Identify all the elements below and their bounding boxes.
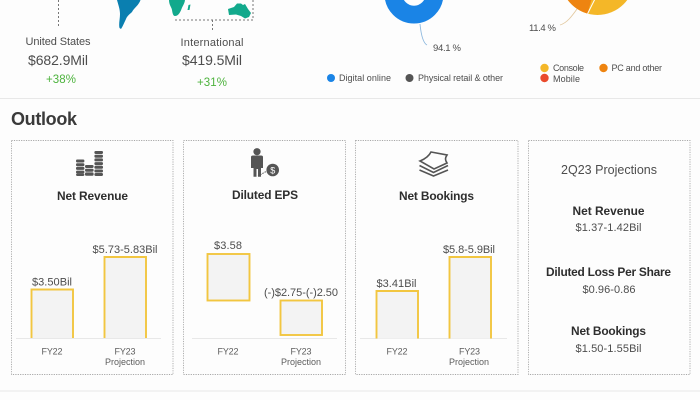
axis label: Projection: Projection	[105, 357, 145, 367]
legend marker: console	[540, 64, 549, 72]
pie console slice	[560, 0, 634, 15]
legend marker: PC	[599, 64, 608, 72]
pie slice divider	[588, 0, 597, 14]
bar value: FY23: $5.8-5.9Bil	[443, 244, 495, 256]
pie orange slice	[560, 0, 598, 14]
icon: coin stacks	[76, 151, 103, 176]
metric value: diluted loss: $0.96-0.86	[582, 284, 636, 296]
bar value: FY22: $3.58	[214, 240, 242, 252]
panel frame	[356, 140, 518, 374]
legend: sales channel	[327, 73, 503, 83]
metric label: net revenue: Net Revenue	[572, 204, 645, 218]
axis label: Projection: Projection	[281, 357, 321, 367]
pie label: 11.4 %	[529, 23, 557, 34]
panel: Net Bookings	[356, 140, 518, 374]
donut ring	[393, 0, 435, 15]
metric value: net bookings: $1.50-1.55Bil	[576, 343, 642, 355]
bar value: FY22: $3.41Bil	[376, 278, 416, 290]
legend marker: physical	[406, 74, 414, 82]
United States connector	[58, 0, 60, 28]
bar value: FY23: (-)$2.75-(-)2.50	[264, 287, 338, 299]
region name: United States	[26, 36, 91, 48]
panel title: Net Revenue	[57, 189, 128, 203]
axis label: FY22: FY22	[386, 346, 408, 356]
chain	[258, 171, 267, 176]
map: Australia	[228, 4, 251, 18]
pie chart: platform	[529, 0, 634, 34]
panel title: Diluted EPS	[232, 188, 298, 202]
world map fragment	[117, 0, 251, 29]
panel frame	[184, 140, 346, 374]
axis label: Projection: Projection	[449, 357, 489, 367]
donut leader line	[420, 24, 427, 45]
panel: Diluted EPS	[184, 140, 346, 374]
axis line	[360, 338, 507, 340]
legend text: mobile: Mobile	[553, 74, 580, 84]
axis label: FY23: FY23	[459, 346, 480, 356]
axis line	[192, 338, 337, 340]
legend marker: digital	[327, 74, 335, 82]
pie leader line	[560, 9, 577, 25]
panel: Net Revenue	[12, 140, 173, 374]
bar: FY22	[208, 254, 250, 300]
bar: FY23 Projection	[104, 257, 146, 338]
region value: $419.5Mil	[182, 52, 242, 68]
bar: FY23 Projection	[450, 257, 491, 338]
region: United States	[26, 36, 91, 86]
person head	[253, 148, 261, 155]
metric label: diluted loss: Diluted Loss Per Share	[546, 265, 671, 279]
region name: International	[180, 37, 244, 49]
icon: stack of papers	[420, 152, 448, 176]
panel frame	[12, 140, 173, 374]
bar value: FY22: $3.50Bil	[32, 276, 72, 288]
axis label: FY23 Projection: FY23	[114, 346, 136, 356]
map: South America	[117, 0, 140, 29]
panel title: 2Q23 Projections	[561, 163, 657, 177]
bar: FY22	[376, 291, 418, 338]
bar: FY23 Projection	[280, 300, 322, 335]
region: International	[180, 37, 244, 89]
legend marker: mobile	[540, 74, 549, 82]
donut label: 94.1 %	[433, 43, 462, 54]
axis label: FY22: FY22	[218, 346, 238, 356]
icon: person with dollar ball and chain	[251, 148, 279, 177]
axis label: FY23: FY23	[290, 346, 312, 356]
legend text: digital: Digital online	[339, 73, 391, 83]
region growth: +31%	[197, 77, 227, 89]
map: Africa	[169, 0, 185, 16]
axis label: FY22: FY22	[42, 346, 62, 356]
dollar ball	[266, 164, 279, 176]
map: Madagascar	[188, 4, 190, 10]
legend: platform	[540, 63, 662, 84]
metric value: net revenue: $1.37-1.42Bil	[576, 222, 642, 234]
legend text: physical: Physical retail & other	[418, 73, 503, 83]
region growth: +38%	[46, 74, 76, 86]
International bracket	[173, 0, 253, 32]
legend text: PC: PC and other	[612, 63, 662, 73]
donut chart: sales channel	[393, 0, 462, 54]
bar value: FY23: $5.73-5.83Bil	[92, 244, 158, 256]
region value: $682.9Mil	[28, 52, 88, 68]
metric label: net bookings: Net Bookings	[571, 324, 646, 338]
panel frame	[528, 140, 690, 374]
heading: Outlook: Outlook	[11, 109, 78, 129]
dollar sign: $	[270, 166, 275, 176]
legend text: console: Console	[553, 63, 584, 73]
panel title: Net Bookings	[399, 189, 474, 203]
bar: FY22	[32, 290, 73, 338]
person body	[251, 156, 263, 177]
axis line	[16, 338, 161, 340]
panel: 2Q23 Projections	[528, 140, 690, 374]
